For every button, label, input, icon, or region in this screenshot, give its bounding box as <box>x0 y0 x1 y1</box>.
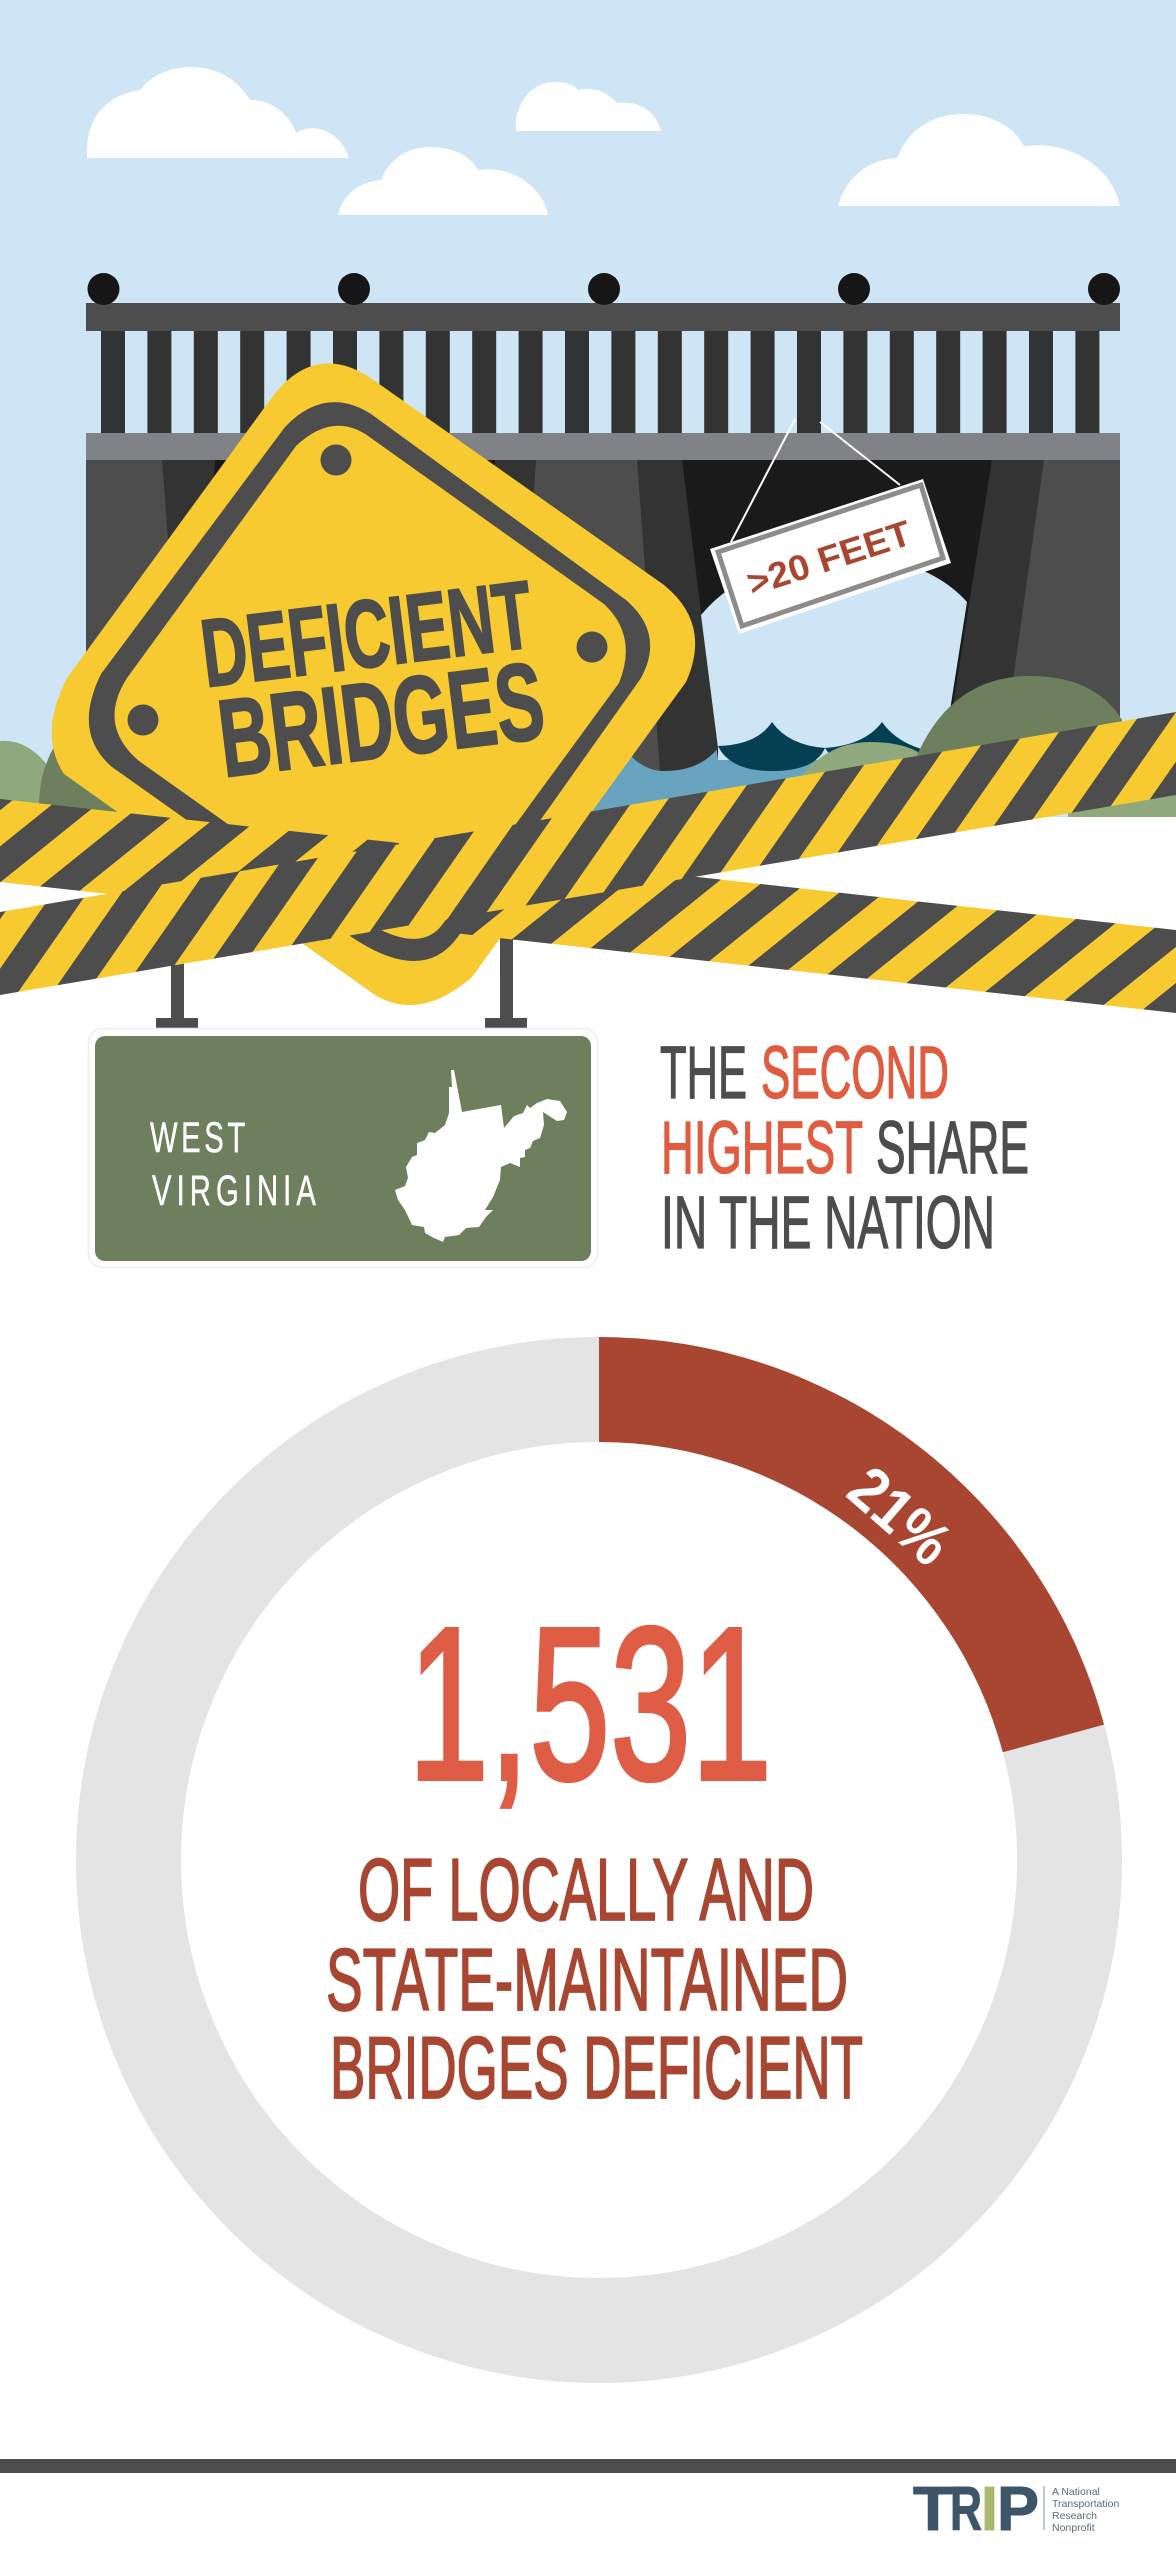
balusters <box>101 331 1099 433</box>
logo letters: I <box>981 2475 998 2544</box>
sign border <box>718 485 943 626</box>
logo letters: T <box>913 2475 953 2544</box>
state name: WEST <box>150 1113 245 1161</box>
water under bridge <box>560 745 920 820</box>
logo tagline: Nonprofit <box>1052 2522 1095 2534</box>
sky through arch <box>701 555 967 760</box>
sign strings <box>731 419 900 542</box>
bolts <box>128 444 608 736</box>
bridge <box>86 273 1120 820</box>
footer rule <box>0 2459 1176 2473</box>
central pier side <box>637 460 718 771</box>
central arch opening <box>682 460 992 760</box>
hanging clearance sign <box>710 419 951 634</box>
TRIP logo <box>913 2475 1119 2544</box>
bush lower right <box>1068 790 1176 817</box>
left arch opening <box>200 460 495 700</box>
dark waves <box>718 722 925 790</box>
warning sign: deficient bridges <box>52 363 695 1005</box>
donut 21 percent segment <box>599 1337 1104 1752</box>
cloud 4 <box>838 114 1120 206</box>
bush right <box>915 676 1122 770</box>
big number: 1,531 <box>408 1583 772 1826</box>
left arch shadow <box>162 460 536 700</box>
caution tape: rising <box>0 712 1176 995</box>
logo tagline: A National <box>1052 2486 1100 2498</box>
logo letters: R <box>950 2475 982 2544</box>
bushes <box>0 676 1176 817</box>
headline: second highest share: SHARE <box>876 1106 1029 1189</box>
sign plate <box>710 479 951 634</box>
sign posts <box>156 930 527 1028</box>
headline: second highest share: THE <box>660 1031 747 1114</box>
sign text: >20 FEET <box>742 512 916 604</box>
donut chart <box>128 1337 1104 2330</box>
donut caption: OF LOCALLY AND <box>358 1840 814 1939</box>
headline: second highest share: SECOND <box>761 1031 949 1114</box>
caution tape: falling, right part <box>445 849 1176 1013</box>
right pier side <box>949 460 1044 730</box>
inner dark border <box>89 402 650 961</box>
sign panel <box>95 1036 591 1261</box>
state name: VIRGINIA <box>152 1166 316 1214</box>
green state sign <box>88 1028 598 1268</box>
clouds <box>87 67 1120 215</box>
bridge abutment body <box>86 460 1120 790</box>
top rail <box>86 303 1120 331</box>
sign diamond <box>52 363 695 1005</box>
logo divider <box>1044 2486 1045 2530</box>
rail finials <box>88 273 1120 305</box>
sign outline <box>88 1028 598 1268</box>
sign title: BRIDGES <box>212 639 550 801</box>
sign title <box>196 561 550 801</box>
donut caption <box>326 1840 863 2117</box>
bush left dark <box>39 725 125 815</box>
logo tagline: Transportation <box>1052 2498 1119 2510</box>
logo letters <box>913 2475 1039 2544</box>
logo letters: P <box>997 2475 1039 2544</box>
cloud 3 <box>338 147 548 215</box>
scene background: sky <box>0 0 1176 817</box>
bush far left <box>0 741 60 815</box>
bridge deck band <box>86 433 1120 460</box>
cloud 2 <box>516 82 661 131</box>
donut track <box>128 1390 1070 2330</box>
logo tagline: Research <box>1052 2510 1097 2522</box>
headline: second highest share <box>660 1031 1029 1264</box>
icon: West Virginia map <box>395 1070 567 1242</box>
donut caption: STATE-MAINTAINED <box>326 1930 848 2029</box>
headline: second highest share: HIGHEST <box>661 1106 863 1189</box>
bush small middle <box>800 742 925 795</box>
segment label: 21% <box>835 1454 965 1579</box>
sign title: DEFICIENT <box>196 561 538 708</box>
cloud 1 <box>87 67 349 158</box>
logo tagline <box>1052 2486 1119 2534</box>
state name <box>150 1113 316 1214</box>
caution tape: falling, left part <box>0 799 399 926</box>
